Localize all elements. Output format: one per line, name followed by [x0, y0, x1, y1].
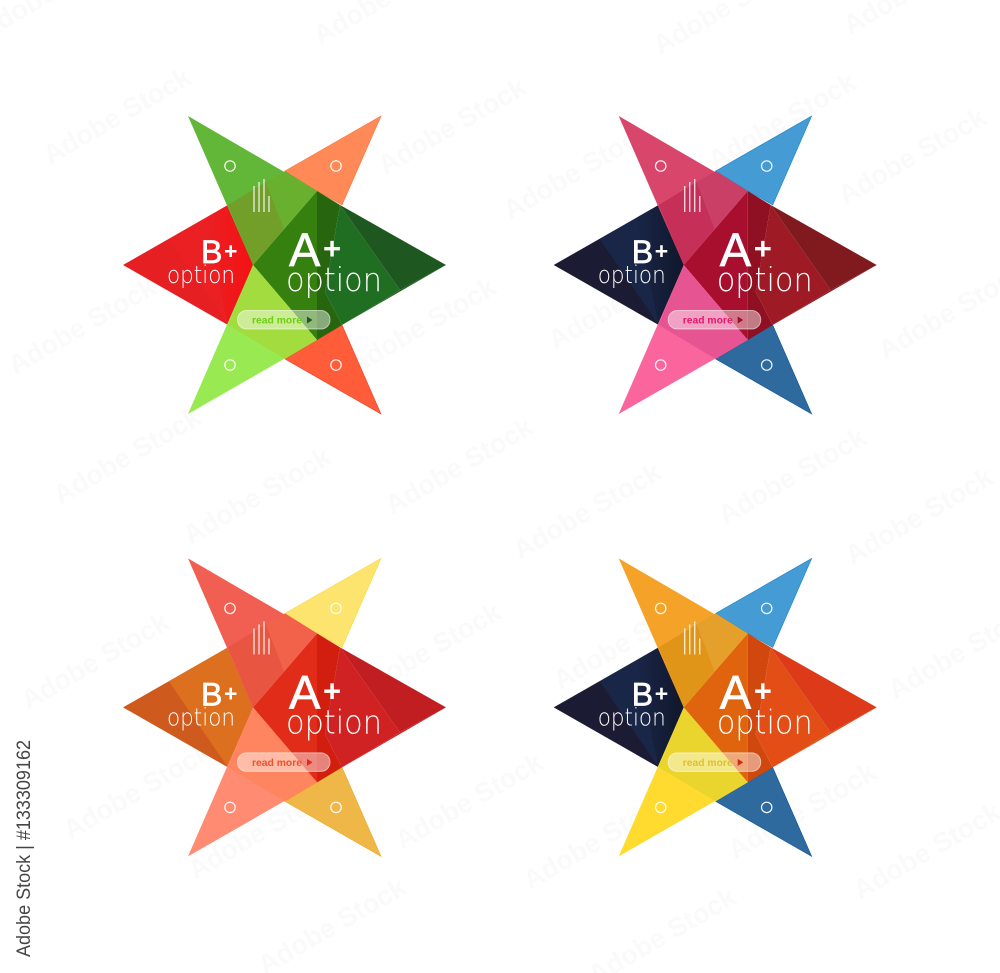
A option label: option — [286, 260, 382, 299]
right A option block — [253, 191, 446, 340]
bottom right triangle — [285, 325, 381, 414]
B+ heading — [632, 234, 668, 270]
top triangle — [188, 558, 317, 707]
B option label: option — [598, 703, 666, 731]
bottom triangle — [619, 265, 748, 414]
A+ heading: + — [323, 231, 341, 266]
bottom right triangle — [285, 767, 381, 856]
bar icon — [685, 179, 700, 212]
B+ heading: + — [655, 680, 668, 706]
A+ heading: + — [754, 673, 772, 708]
read more button — [238, 310, 330, 329]
watermark pattern: Adobe Stock — [713, 421, 872, 530]
bar icon — [685, 621, 700, 654]
B+ heading: B — [632, 676, 653, 712]
A+ heading — [720, 223, 772, 276]
B option label: option — [598, 261, 666, 289]
bottom triangle — [188, 707, 317, 856]
ring markers — [656, 603, 772, 813]
watermark pattern: Adobe Stock — [548, 586, 707, 695]
watermark pattern: Adobe Stock — [16, 606, 175, 715]
read more button — [668, 753, 761, 771]
B option label: option — [167, 261, 235, 289]
watermark pattern: Adobe Stock — [840, 461, 999, 570]
left B option block — [554, 647, 684, 767]
right A option block — [253, 633, 446, 782]
watermark pattern: Adobe Stock — [703, 66, 862, 175]
watermark pattern: Adobe Stock — [183, 776, 342, 885]
watermark pattern: Adobe Stock — [498, 116, 657, 225]
ring markers — [656, 161, 772, 370]
panel: green star — [123, 116, 446, 414]
top right triangle — [285, 558, 381, 647]
A+ heading: A — [289, 223, 321, 276]
watermark pattern: Adobe Stock — [38, 61, 197, 170]
watermark pattern: Adobe Stock — [178, 441, 337, 550]
watermark pattern: Adobe Stock — [723, 756, 882, 865]
watermark pattern: Adobe Stock — [48, 401, 207, 510]
B+ heading — [632, 676, 668, 712]
top right triangle — [716, 116, 812, 205]
B+ heading: B — [201, 234, 222, 270]
A option label: option — [717, 702, 813, 741]
top triangle — [188, 116, 317, 265]
A+ heading — [720, 665, 772, 718]
B+ heading: + — [224, 238, 237, 264]
B+ heading — [201, 676, 237, 712]
watermark pattern: Adobe Stock — [58, 736, 217, 845]
top triangle — [619, 116, 748, 265]
bottom right triangle — [716, 325, 812, 414]
watermark pattern: Adobe Stock — [343, 271, 502, 380]
right A option block — [684, 633, 877, 782]
A+ heading: + — [323, 673, 341, 708]
B+ heading: B — [201, 676, 222, 712]
watermark pattern: Adobe Stock — [543, 246, 702, 355]
B option label: option — [167, 703, 235, 731]
watermark pattern: Adobe Stock — [518, 786, 677, 895]
watermark pattern: Adobe Stock — [373, 71, 532, 180]
A+ heading — [289, 665, 341, 718]
top triangle — [619, 558, 748, 707]
right A option block — [684, 191, 877, 340]
read more button: read more — [252, 758, 302, 769]
A+ heading: A — [720, 223, 752, 276]
panel: orange star — [554, 558, 877, 856]
B+ heading: + — [224, 680, 237, 706]
A option label: option — [717, 260, 813, 299]
bottom triangle — [619, 707, 748, 856]
panel: red star — [123, 558, 446, 856]
bar icon — [254, 621, 269, 654]
watermark pattern: Adobe Stock — [833, 101, 992, 210]
top right triangle — [285, 116, 381, 205]
read more button — [668, 310, 761, 329]
panel: crimson star — [554, 116, 877, 414]
A+ heading: + — [754, 231, 772, 266]
left B option block — [123, 647, 253, 767]
B+ heading: + — [655, 238, 668, 264]
read more button: read more — [683, 758, 733, 769]
A+ heading: A — [289, 665, 321, 718]
stock id caption: Adobe Stock | #133309162 — [14, 740, 35, 957]
ring markers — [225, 603, 341, 813]
bar icon — [254, 179, 269, 212]
top right triangle — [716, 558, 812, 647]
watermark pattern: Adobe Stock — [380, 411, 539, 520]
A+ heading: A — [720, 665, 752, 718]
watermark pattern: Adobe Stock — [348, 596, 507, 705]
left B option block — [554, 205, 684, 325]
read more button — [238, 753, 330, 771]
A+ heading — [289, 223, 341, 276]
watermark pattern: Adobe Stock — [390, 746, 549, 855]
read more button: read more — [683, 316, 733, 326]
A option label: option — [286, 702, 382, 741]
B+ heading — [201, 234, 237, 270]
B+ heading: B — [632, 234, 653, 270]
left B option block — [123, 205, 253, 325]
ring markers — [225, 161, 341, 370]
watermark pattern: Adobe Stock — [3, 271, 162, 380]
read more button: read more — [252, 316, 302, 326]
bottom triangle — [188, 265, 317, 414]
bottom right triangle — [716, 767, 812, 856]
watermark pattern: Adobe Stock — [508, 456, 667, 565]
